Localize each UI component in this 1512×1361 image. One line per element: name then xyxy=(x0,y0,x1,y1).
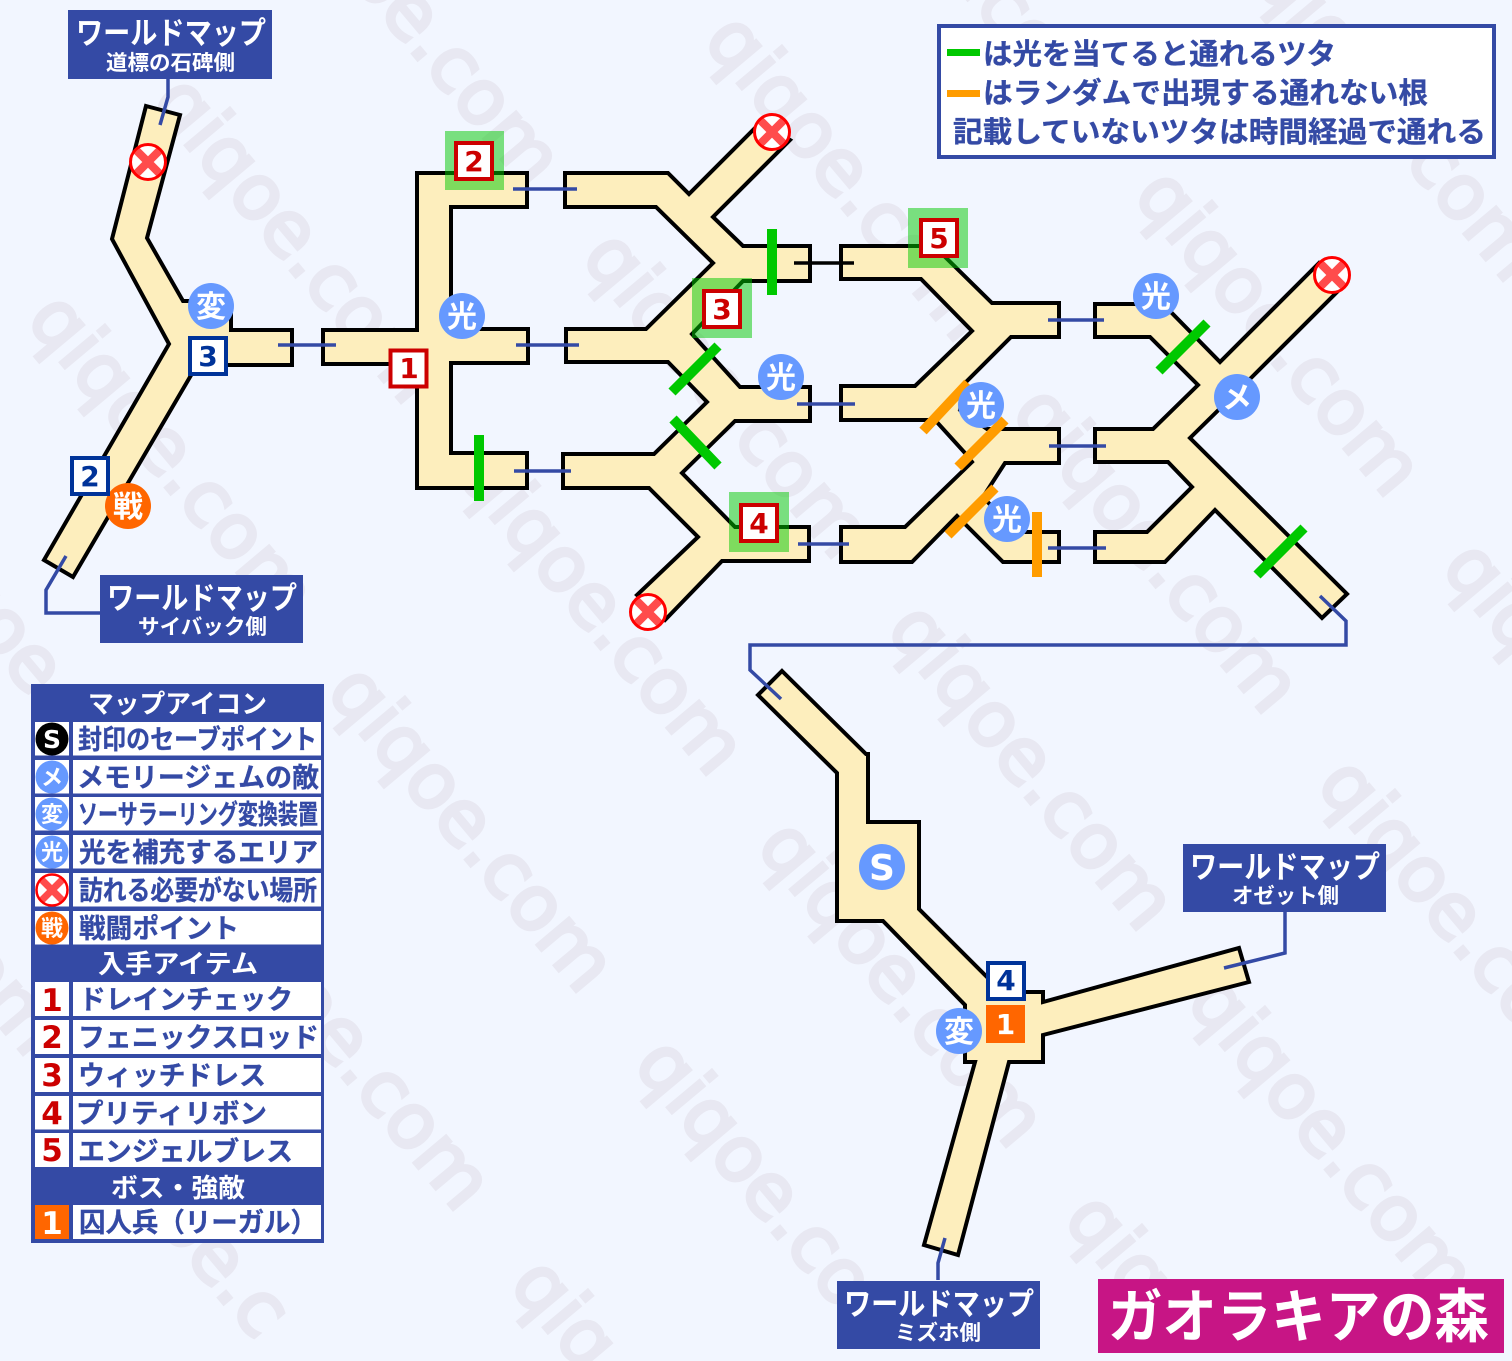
legend labels: items: フェニックスロッド xyxy=(78,1023,319,1053)
text: qiqoe.com xyxy=(11,274,335,636)
corridor: west area xyxy=(44,106,292,577)
legend item numbers: 5 xyxy=(41,1133,63,1169)
text: qiqoe.com xyxy=(441,429,765,791)
corridor: east branches xyxy=(1095,263,1347,618)
legend icons: S xyxy=(43,725,61,754)
legend labels: icons: 戦闘ポイント xyxy=(79,914,239,944)
map round icons: 光 xyxy=(766,362,796,395)
map round icons: 光 xyxy=(992,504,1022,537)
label: world map, mizuho side: ミズホ側 xyxy=(895,1321,981,1345)
label: world map, mizuho side xyxy=(837,1281,1040,1349)
text: qiqoe.com xyxy=(1171,956,1495,1318)
label: world map, saibak side: ワールドマップ xyxy=(107,581,297,616)
text: qiqoe.com xyxy=(311,646,635,1008)
map round icons: 光 xyxy=(966,390,996,423)
label: world map, ozet side: オゼット側 xyxy=(1232,884,1339,908)
map item boxes: 1 xyxy=(399,352,419,385)
text: qiqoe.com xyxy=(996,367,1320,729)
map item boxes: 4 xyxy=(996,964,1016,997)
map item boxes: 2 xyxy=(80,460,100,493)
legend heading: map icons: マップアイコン xyxy=(88,689,267,719)
map item boxes: 4 xyxy=(749,507,769,540)
text: qiqoe.com xyxy=(871,584,1195,946)
map item boxes: 5 xyxy=(929,222,949,255)
corridor: east-middle branches xyxy=(841,246,1059,562)
text: qiqoe.com xyxy=(188,864,512,1226)
legend item numbers: 4 xyxy=(41,1096,63,1132)
legend labels: icons: 光を補充するエリア xyxy=(79,838,318,868)
title: ガオラキアの森 xyxy=(1108,1285,1489,1350)
map item boxes xyxy=(72,143,1025,1043)
map item boxes: 2 xyxy=(464,145,484,178)
legend labels: items: プリティリボン xyxy=(76,1099,267,1129)
label: world map, stone monument side: ワールドマップ xyxy=(76,16,266,51)
text: qiqoe.com xyxy=(741,801,1065,1163)
legend boss row: 1 xyxy=(41,1206,63,1242)
item highlights xyxy=(445,131,968,552)
map round icons: 光 xyxy=(447,301,477,334)
corridor: south area xyxy=(758,671,1249,1255)
note box: 記載していないツタは時間経過で通れる xyxy=(953,116,1486,149)
label: world map, stone monument side xyxy=(68,10,272,79)
legend rows: icons xyxy=(35,722,321,1239)
map corridors xyxy=(44,106,1347,1255)
text: qiqoe.com xyxy=(1118,150,1442,512)
legend boss row: 囚人兵（リーガル） xyxy=(79,1208,317,1238)
legend labels: icons: 封印のセーブポイント xyxy=(78,724,317,755)
legend boss row xyxy=(35,1205,317,1242)
orange root barriers xyxy=(923,383,1037,577)
map round icons: 変 xyxy=(196,291,226,324)
legend labels: icons: 訪れる必要がない場所 xyxy=(79,875,317,906)
legend labels: items: ウィッチドレス xyxy=(78,1061,266,1091)
label: world map, saibak side xyxy=(100,575,303,643)
map round icons xyxy=(105,273,1260,1054)
legend labels: icons xyxy=(77,724,319,944)
legend labels: items xyxy=(76,985,319,1167)
legend panel xyxy=(31,684,324,1243)
label: world map, stone monument side: 道標の石碑側 xyxy=(106,52,235,75)
map item boxes: 3 xyxy=(198,340,218,373)
legend item numbers: 3 xyxy=(41,1058,63,1094)
legend icons: 戦 xyxy=(41,916,63,941)
text: qiqoe.com xyxy=(136,57,460,419)
legend labels: items: エンジェルブレス xyxy=(78,1136,293,1167)
connector lines xyxy=(46,79,1346,1280)
label: world map, saibak side: サイバック側 xyxy=(138,616,267,639)
legend icons: 光 xyxy=(41,840,63,865)
label: world map, ozet side xyxy=(1183,844,1386,912)
text: qiqoe.c xyxy=(64,1084,310,1354)
not-needed markers xyxy=(130,114,1350,630)
map round icons: 変 xyxy=(944,1016,974,1049)
map item boxes: 1 xyxy=(996,1008,1015,1041)
map round icons: メ xyxy=(1222,382,1252,415)
legend labels: items: ドレインチェック xyxy=(79,985,293,1015)
text: qiqoe.com xyxy=(688,0,1012,357)
note box xyxy=(939,26,1494,157)
text: qiqoe.co xyxy=(618,1019,894,1324)
text: qiq xyxy=(1048,1174,1192,1322)
corridor: middle branches xyxy=(563,122,810,620)
map round icons: 光 xyxy=(1141,281,1171,314)
legend labels: icons: メモリージェムの敵 xyxy=(77,763,319,793)
corridor: central trunk xyxy=(323,173,528,488)
legend icons: メ xyxy=(41,765,63,790)
label: world map, ozet side: ワールドマップ xyxy=(1190,850,1380,885)
label: world map, mizuho side: ワールドマップ xyxy=(844,1287,1034,1322)
text: qiqoe.com xyxy=(566,212,890,574)
legend labels: icons: ソーサラーリング変換装置 xyxy=(78,799,318,830)
map item boxes: 3 xyxy=(712,293,732,326)
legend item numbers xyxy=(41,983,63,1169)
legend heading: bosses: ボス・強敵 xyxy=(111,1173,245,1203)
note box: は光を当てると通れるツタ xyxy=(983,38,1336,71)
green vine barriers xyxy=(479,229,1304,575)
legend item numbers: 2 xyxy=(41,1020,63,1056)
note box: はランダムで出現する通れない根 xyxy=(983,76,1428,110)
legend icons: 変 xyxy=(41,802,63,827)
map round icons: S xyxy=(869,848,895,889)
legend icons xyxy=(36,722,68,944)
legend item numbers: 1 xyxy=(41,983,63,1019)
map round icons: 戦 xyxy=(113,491,143,524)
legend heading: items: 入手アイテム xyxy=(98,949,258,979)
